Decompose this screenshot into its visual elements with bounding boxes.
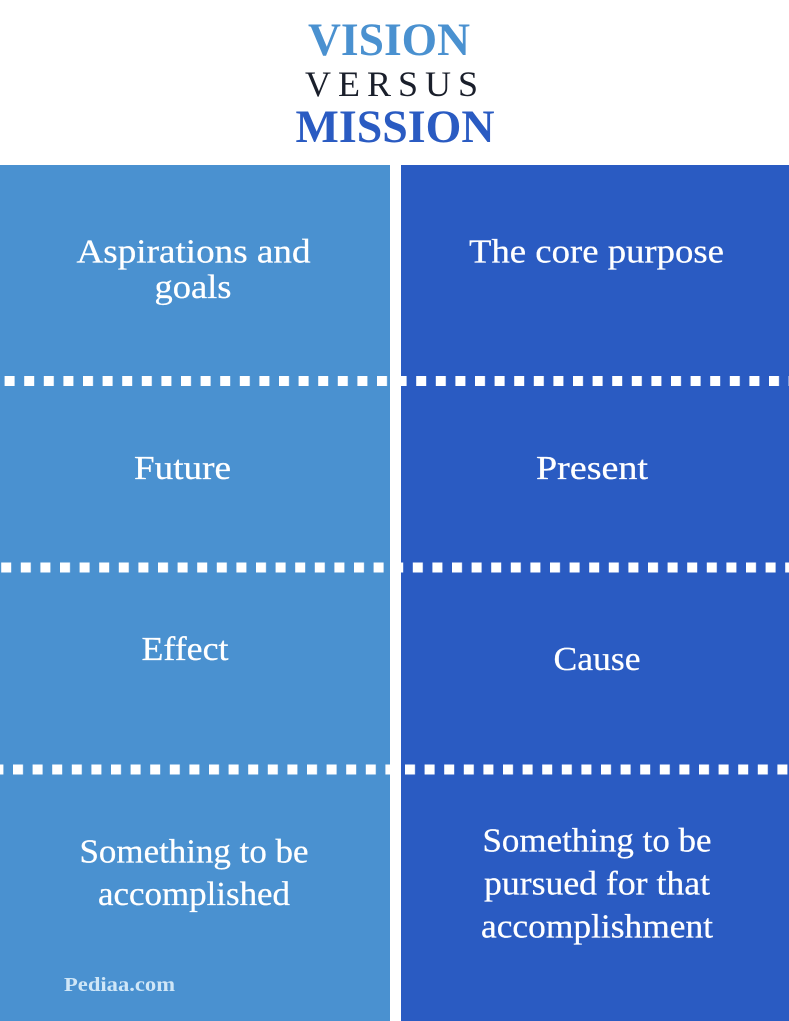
mission text: something to be pursued for that accomplishment (481, 822, 714, 946)
vision text: aspirations and goals: Aspirations and (76, 234, 310, 270)
mission text: something to be pursued for that accomplishment: pursued for that (484, 866, 711, 902)
watermark: pediaa.com: Pediaa.com (64, 974, 175, 996)
heading: versus: VERSUS (305, 64, 478, 104)
panel: vision column (0, 165, 390, 1021)
mission text: something to be pursued for that accomplishment: Something to be (482, 822, 712, 860)
mission text: the core purpose: The core purpose (469, 234, 724, 270)
mission text: something to be pursued for that accomplishment: accomplishment (481, 908, 714, 946)
vision text: aspirations and goals: goals (154, 269, 232, 306)
divider: row 3 (0, 764, 789, 774)
vision text: aspirations and goals (76, 234, 310, 306)
vision text: effect: Effect (142, 631, 229, 668)
heading: vision: VISION (308, 14, 470, 66)
vision text: something to be accomplished: Something to be (80, 834, 308, 870)
divider: row 1 (0, 376, 789, 386)
mission text: cause: Cause (554, 641, 640, 678)
vision text: future: Future (134, 450, 231, 487)
divider: row 2 (0, 562, 789, 572)
vision text: something to be accomplished (80, 834, 308, 913)
vision text: something to be accomplished: accomplished (98, 876, 290, 913)
panel: mission column (401, 165, 789, 1021)
title (296, 14, 495, 153)
mission text: present: Present (536, 450, 649, 487)
heading: mission: MISSION (296, 101, 495, 153)
